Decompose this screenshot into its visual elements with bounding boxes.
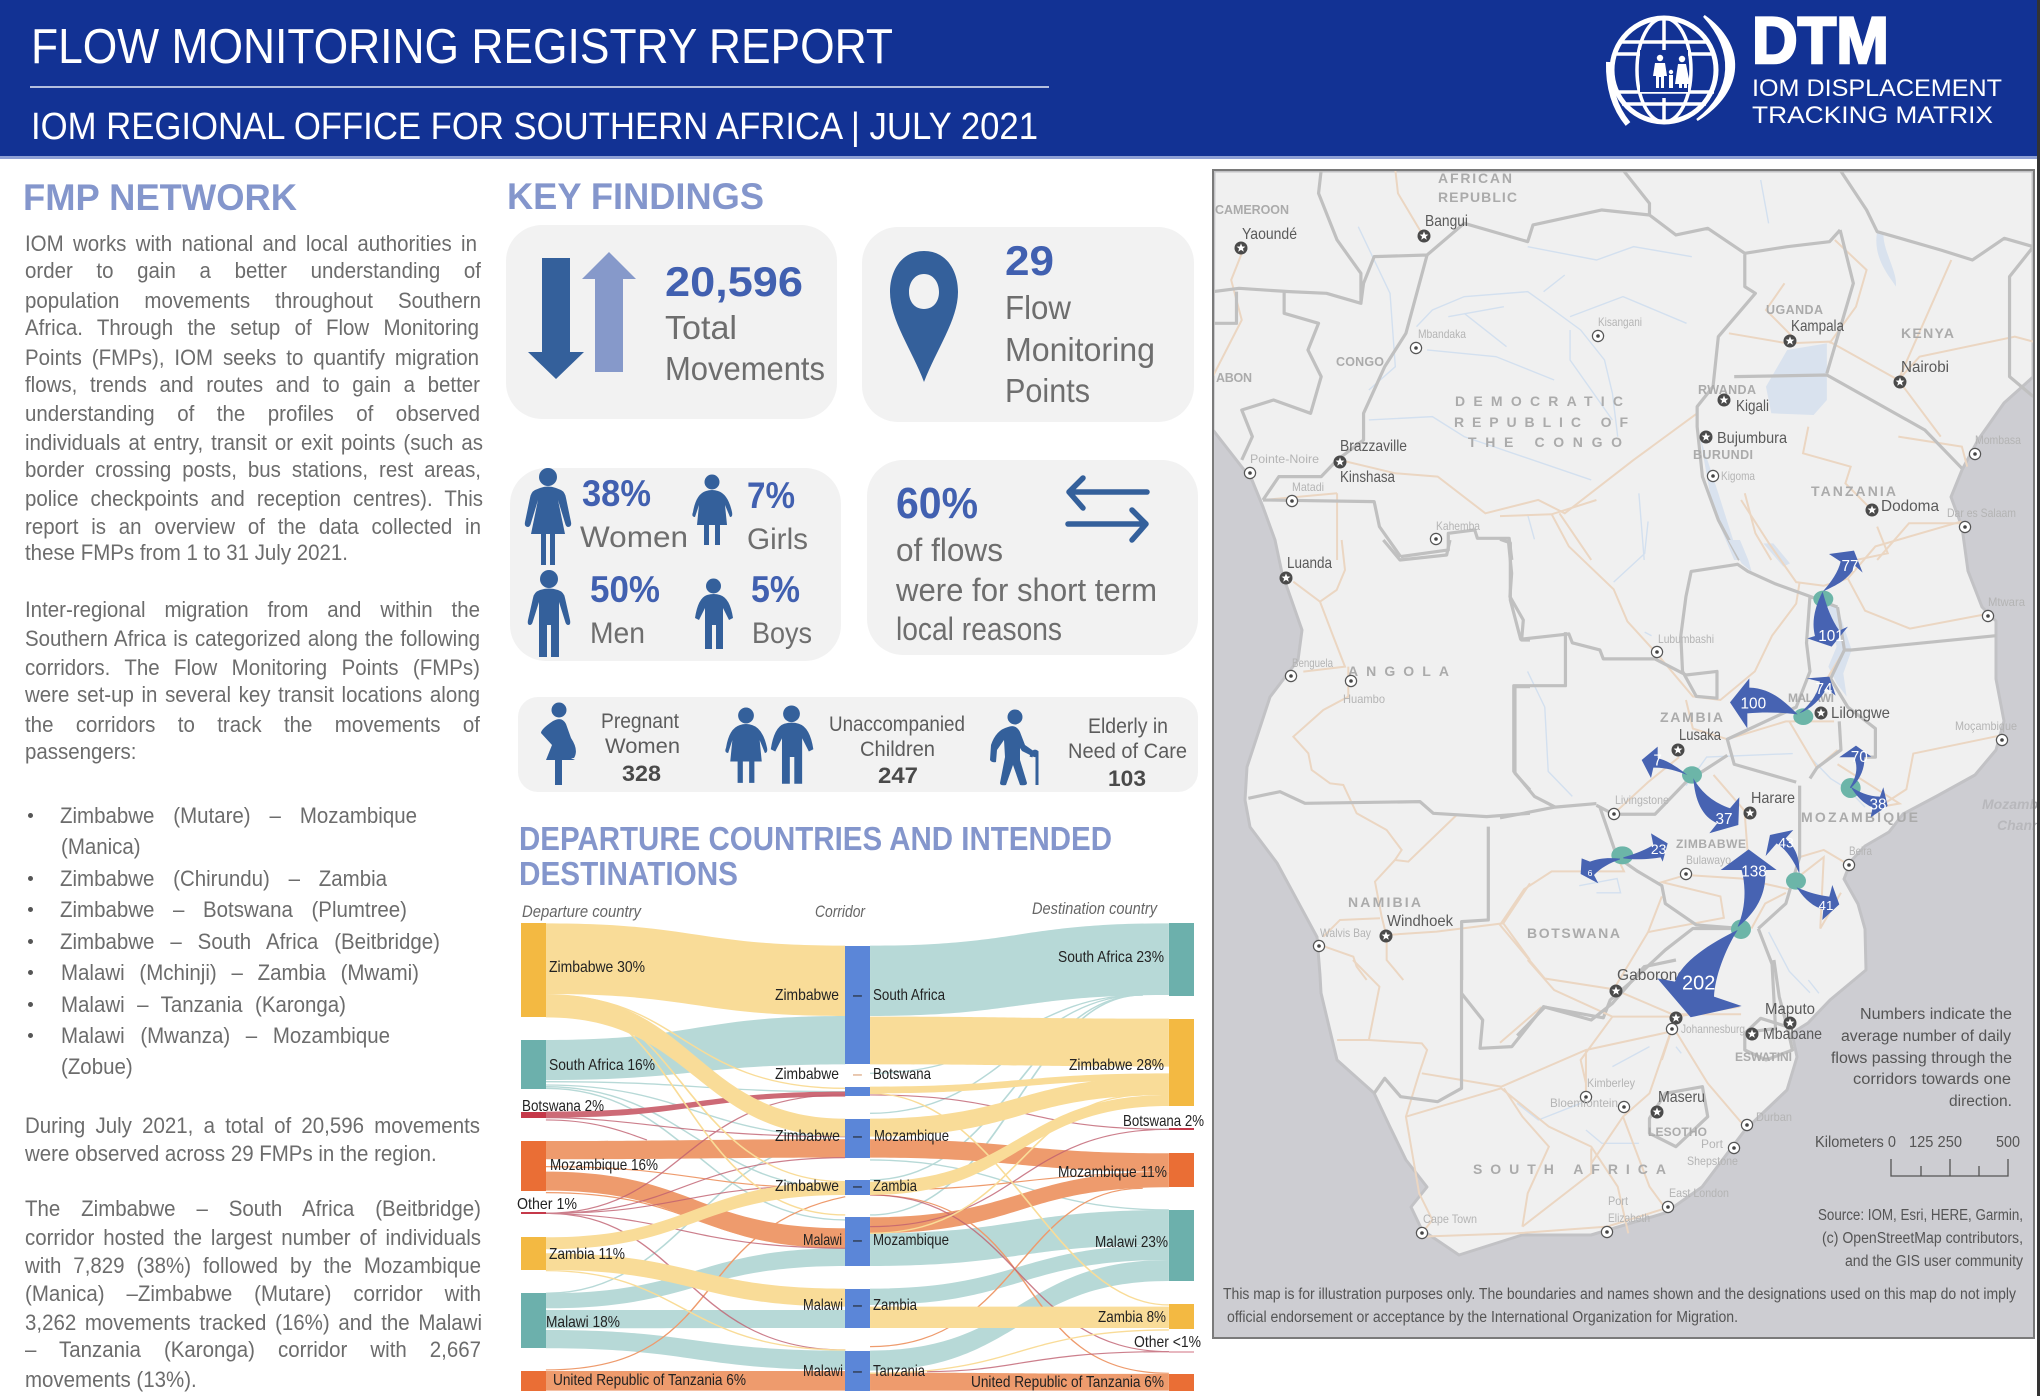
list: corridors	[28, 803, 440, 1079]
text block: largest corridors	[25, 1196, 482, 1392]
list: corridors: Zimbabwe (Mutare) – Mozambique	[60, 803, 417, 828]
text block: FMP introduction	[25, 231, 483, 565]
text block: FMP introduction: Points (FMPs), IOM seeks to quantify migration	[25, 345, 479, 370]
title: FLOW MONITORING REGISTRY REPORT	[31, 20, 893, 74]
map minor city labels: Livingstone	[1615, 793, 1669, 807]
stat: 60 percent of flows: of flows	[896, 532, 1003, 568]
map country labels: AFRICAN	[1438, 170, 1512, 186]
logo: DTM wordmark: TRACKING MATRIX	[1752, 102, 1993, 129]
sankey corridor labels: Malawi	[803, 1232, 842, 1249]
map minor city labels: Bulawayo	[1686, 853, 1731, 867]
stat: 20,596 total movements	[665, 258, 825, 387]
sankey departure labels: Botswana 2%	[522, 1098, 604, 1115]
stat: 29 flow monitoring points: Points	[1005, 372, 1090, 409]
list: corridors: Malawi (Mchinji) – Zambia (Mwami)	[61, 960, 419, 985]
text block: largest corridors: with 7,829 (38%) followed by the Mozambique	[25, 1253, 481, 1278]
sankey destination labels: Zambia 8%	[1098, 1309, 1166, 1326]
list: corridors: Zimbabwe – South Africa (Beitbridge)	[60, 929, 440, 954]
sankey departure labels: Zimbabwe 30%	[549, 959, 645, 976]
sankey destination labels: Botswana 2%	[1123, 1113, 1204, 1130]
northern flow arrows: 37	[1715, 811, 1733, 828]
map country labels: ABON	[1216, 371, 1252, 385]
stat: pregnant women: Women	[605, 735, 680, 758]
stat: 20,596 total movements: 20,596	[665, 258, 803, 305]
stat: 29 flow monitoring points	[1005, 237, 1155, 409]
sankey column headers: Departure country	[522, 902, 642, 921]
sankey column headers	[522, 899, 1158, 921]
map capital city labels: Kigali	[1736, 398, 1769, 415]
text block: FMP introduction: these FMPs from 1 to 31 July 2021.	[25, 540, 348, 565]
southern flow arrows	[1581, 830, 1839, 1017]
map country labels: SOUTH AFRICA	[1473, 1161, 1666, 1177]
stat: men: Men	[590, 617, 645, 650]
map minor city labels: Cape Town	[1423, 1212, 1477, 1226]
icon: girl and boy	[725, 705, 813, 784]
stat: 20,596 total movements: Total	[665, 309, 737, 346]
map capital city labels: Gaborone	[1617, 967, 1686, 984]
map country labels: TANZANIA	[1811, 483, 1896, 499]
map capital city labels: Brazzaville	[1340, 438, 1407, 455]
map minor city labels: Mtwara	[1988, 595, 2025, 609]
sankey destination labels: Malawi 23%	[1095, 1234, 1168, 1251]
text block: corridors introduction	[25, 597, 480, 764]
map minor city labels: Matadi	[1292, 480, 1324, 494]
sankey column headers: Destination country	[1032, 899, 1158, 918]
sankey corridor labels: Zimbabwe	[775, 1178, 839, 1195]
stat: pregnant women	[601, 710, 680, 786]
map minor city labels: Beira	[1849, 844, 1872, 858]
map disclaimer: official endorsement or acceptance by the International Organization for Migration.	[1227, 1309, 1738, 1326]
map capital city labels: Kampala	[1791, 318, 1844, 335]
map source note	[1818, 1207, 2023, 1270]
text block: total movements	[25, 1113, 480, 1166]
map note: how to read numbers: flows passing through the	[1831, 1050, 2012, 1067]
stat: boys: Boys	[752, 617, 812, 650]
stat: pregnant women: 328	[622, 761, 661, 786]
sankey destination nodes	[1169, 923, 1194, 1391]
text block: total movements: were observed across 29 FMPs in the region.	[25, 1141, 437, 1166]
map capital city labels: Dodoma	[1881, 498, 1939, 515]
sankey corridor labels: Mozambique	[874, 1128, 949, 1145]
map country labels: CAMEROON	[1215, 203, 1289, 217]
map minor city markers	[1244, 330, 2008, 1239]
map minor city labels: Port	[1608, 1194, 1629, 1208]
stat: pregnant women: Pregnant	[601, 710, 679, 733]
map minor city labels: Kisangani	[1598, 315, 1642, 329]
icon: down and up arrows	[528, 252, 636, 379]
stat: unaccompanied children	[829, 713, 965, 788]
list: corridors: Malawi (Mwanza) – Mozambique	[61, 1023, 390, 1048]
map minor city labels: Lubumbashi	[1658, 632, 1714, 646]
sankey departure labels: Malawi 18%	[546, 1314, 620, 1331]
map source note: (c) OpenStreetMap contributors,	[1822, 1230, 2023, 1247]
map country labels: MOZAMBIQUE	[1801, 809, 1918, 825]
map minor city labels: Mombasa	[1975, 433, 2021, 447]
map capital city labels: Yaoundé	[1242, 226, 1297, 243]
map country labels: ESWATINI	[1735, 1050, 1792, 1064]
map capital city labels: Lusaka	[1679, 727, 1721, 744]
map minor city labels: Pointe-Noire	[1250, 452, 1319, 466]
sankey corridor labels: –	[853, 1128, 862, 1145]
map country labels: NAMIBIA	[1348, 894, 1421, 910]
sankey column headers: Corridor	[815, 902, 866, 921]
map note: how to read numbers	[1831, 1006, 2012, 1110]
map capital city labels: Luanda	[1287, 555, 1332, 572]
map country labels: Chann	[1997, 817, 2040, 833]
map minor city labels: Johannesburg	[1681, 1022, 1745, 1036]
map capital city markers	[1234, 230, 1906, 1118]
stat: unaccompanied children: Children	[860, 738, 935, 761]
logo: DTM wordmark: DTM	[1752, 3, 1889, 77]
stat: women	[580, 473, 688, 554]
sankey corridor labels: Zimbabwe	[775, 1128, 840, 1145]
map minor city labels: Kahemba	[1436, 519, 1480, 533]
panel: flow monitoring points	[862, 227, 1194, 422]
map country labels: DEMOCRATIC	[1455, 393, 1623, 409]
text block: FMP introduction: order to gain a better understanding of	[25, 258, 481, 283]
map country labels: KENYA	[1901, 325, 1954, 341]
sankey departure labels: United Republic of Tanzania 6%	[553, 1372, 746, 1389]
map source note: and the GIS user community	[1845, 1253, 2023, 1270]
northern flow arrows: 38	[1869, 796, 1887, 813]
southern flow arrows: 43	[1778, 834, 1794, 850]
text block: FMP introduction: understanding of the profiles of observed	[25, 401, 480, 426]
map disclaimer	[1223, 1286, 2016, 1326]
map minor city labels: Durban	[1756, 1110, 1792, 1124]
map minor city labels: Mbandaka	[1418, 327, 1466, 341]
map minor city labels: Moçambique	[1955, 719, 2017, 733]
stat: girls	[747, 475, 808, 556]
sankey flows	[546, 923, 1169, 1391]
sankey corridor labels: Botswana	[873, 1066, 931, 1083]
sankey departure labels: Zambia 11%	[549, 1246, 625, 1263]
sankey destination labels: Other <1%	[1134, 1334, 1201, 1351]
map minor city labels: Dar es Salaam	[1947, 506, 2016, 520]
text block: FMP introduction: report is an overview of the data collected in	[25, 514, 481, 539]
sankey corridor labels: Mozambique	[873, 1232, 949, 1249]
sankey corridor labels: Zimbabwe	[775, 987, 839, 1004]
text block: FMP introduction: IOM works with national and local authorities in	[25, 231, 477, 256]
stat: elderly in need of care: Need of Care	[1068, 740, 1187, 763]
stat: elderly in need of care	[1068, 715, 1187, 791]
stat: 29 flow monitoring points: Monitoring	[1005, 331, 1155, 368]
stat: 20,596 total movements: Movements	[665, 350, 825, 387]
heading: departure countries and intended destinations	[519, 820, 1112, 892]
sankey departure labels	[517, 959, 746, 1389]
text block: FMP introduction: population movements throughout Southern	[25, 288, 481, 313]
sankey corridor labels	[775, 987, 949, 1380]
stat: girls: 7%	[747, 475, 795, 516]
map panel	[1213, 170, 2040, 1338]
sankey corridor labels: Zambia	[873, 1178, 917, 1195]
stat: unaccompanied children: 247	[878, 763, 918, 788]
map scale bar: 500	[1996, 1134, 2020, 1151]
map capital city labels: Mbabane	[1763, 1026, 1822, 1043]
panel: sex and age breakdown	[510, 468, 841, 661]
map country labels: ANGOLA	[1348, 663, 1449, 679]
text block: FMP introduction: border crossing posts, bus stations, rest areas,	[25, 457, 481, 482]
text block: largest corridors: The Zimbabwe – South Africa (Beitbridge)	[25, 1196, 481, 1221]
stat: men	[590, 569, 660, 650]
sankey destination labels	[971, 949, 1204, 1391]
heading: FMP network: FMP NETWORK	[23, 177, 297, 218]
icon: boy	[695, 578, 733, 649]
map note: how to read numbers: average number of daily	[1841, 1028, 2011, 1045]
logo: DTM wordmark: IOM DISPLACEMENT	[1752, 75, 2002, 102]
stat: 60 percent of flows: were for short term	[895, 572, 1157, 608]
map country labels: ZIMBABWE	[1676, 837, 1746, 851]
text block: FMP introduction: Africa. Through the setup of Flow Monitoring	[25, 315, 479, 340]
stat: 60 percent of flows: local reasons	[896, 611, 1062, 647]
icon: girl	[692, 474, 732, 545]
map country labels: UGANDA	[1766, 303, 1823, 317]
stat: boys: 5%	[751, 569, 800, 610]
sankey destination labels: South Africa 23%	[1058, 949, 1164, 966]
logo: DTM wordmark	[1752, 3, 2002, 129]
stat: 29 flow monitoring points: Flow	[1005, 289, 1071, 326]
text block: corridors introduction: passengers:	[25, 739, 136, 764]
map country labels: REPUBLIC	[1438, 189, 1517, 205]
sankey corridor labels: Tanzania	[873, 1363, 925, 1380]
icon: woman	[525, 468, 571, 565]
text block: corridors introduction: the corridors to track the movements of	[25, 712, 480, 737]
northern flow arrows: 77	[1841, 558, 1859, 575]
text block: corridors introduction: were set-up in several key transit locations along	[25, 682, 480, 707]
text block: corridors introduction: corridors. The Flow Monitoring Points (FMPs)	[25, 655, 480, 680]
map note: how to read numbers: direction.	[1949, 1093, 2012, 1110]
map capital city labels: Nairobi	[1901, 359, 1949, 376]
stat: 60 percent of flows: 60%	[896, 479, 978, 528]
northern flow arrows: 7	[1653, 753, 1662, 770]
heading: departure countries and intended destinations: DEPARTURE COUNTRIES AND INTENDED	[519, 820, 1112, 857]
map country labels: BOTSWANA	[1527, 925, 1620, 941]
stat: girls: Girls	[747, 523, 808, 556]
northern flow arrows: 100	[1741, 695, 1766, 712]
sankey departure nodes	[521, 923, 546, 1391]
map minor city labels	[1250, 315, 2025, 1226]
stat: elderly in need of care: Elderly in	[1088, 715, 1168, 738]
stat: 60 percent of flows	[895, 479, 1157, 647]
map country labels: CONGO	[1336, 355, 1384, 369]
map country labels: ZAMBIA	[1660, 709, 1723, 725]
sankey corridor labels: –	[853, 987, 862, 1004]
map country labels: BURUNDI	[1693, 448, 1753, 462]
heading: key findings: KEY FINDINGS	[507, 176, 764, 217]
map minor city labels: East London	[1669, 1186, 1729, 1200]
sankey corridor labels: Malawi	[803, 1363, 843, 1380]
sankey destination labels: United Republic of Tanzania 6%	[971, 1374, 1164, 1391]
map capital city labels: Bangui	[1425, 213, 1468, 230]
southern flow arrows: 6	[1588, 868, 1593, 878]
text block: corridors introduction: Southern Africa is categorized along the following	[25, 626, 480, 651]
southern flow arrows: 23	[1651, 841, 1667, 857]
text block: FMP introduction: individuals at entry, transit or exit points (such as	[25, 430, 483, 455]
panel: short term flows	[867, 460, 1198, 655]
map country labels: RWANDA	[1698, 383, 1756, 397]
stat: elderly in need of care: 103	[1108, 766, 1146, 791]
map country labels: THE CONGO	[1468, 434, 1622, 450]
logo: IOM globe	[1609, 16, 1734, 124]
list: corridors: (Zobue)	[61, 1054, 133, 1079]
sankey corridor labels: –	[853, 1066, 862, 1083]
map capital city labels: Windhoek	[1387, 913, 1454, 930]
stat: women: 38%	[582, 473, 651, 514]
southern flow arrows: 138	[1741, 864, 1767, 881]
chart: sankey of departure, corridor and destination	[517, 899, 1204, 1391]
map minor city labels: Bloemfontein	[1550, 1096, 1618, 1110]
panel: total movements	[506, 225, 837, 419]
map minor city labels: Huambo	[1343, 692, 1385, 706]
list: corridors: Zimbabwe – Botswana (Plumtree)	[60, 897, 407, 922]
sankey corridor labels: Zambia	[873, 1297, 917, 1314]
northern flow arrows	[1642, 551, 1888, 833]
map capital city labels: Bujumbura	[1717, 430, 1787, 447]
icon: elderly person with cane	[990, 710, 1037, 785]
sankey corridor labels: Malawi	[803, 1297, 843, 1314]
map country labels: Mozamb	[1982, 796, 2038, 812]
map minor city labels: Benguela	[1292, 656, 1333, 670]
text block: FMP introduction: flows, trends and routes and to gain a better	[25, 372, 480, 397]
sankey departure labels: Mozambique 16%	[550, 1157, 658, 1174]
heading: departure countries and intended destinations: DESTINATIONS	[519, 855, 738, 892]
sankey corridor labels: –	[853, 1297, 862, 1314]
icon: man	[528, 570, 570, 657]
text block: FMP introduction: police checkpoints and reception centres). This	[25, 486, 483, 511]
northern flow arrows: 74	[1815, 681, 1833, 698]
sankey corridor labels: –	[853, 1363, 862, 1380]
map base: land, borders, roads and rivers	[1213, 170, 2033, 1255]
northern flow arrows: 101	[1818, 628, 1844, 645]
map country labels	[1215, 170, 2040, 1177]
stat: men: 50%	[590, 569, 660, 610]
list: corridors: Malawi – Tanzania (Karonga)	[61, 992, 346, 1017]
map scale bar: Kilometers 0	[1815, 1134, 1896, 1151]
map note: how to read numbers: Numbers indicate the	[1860, 1006, 2012, 1023]
sankey corridor labels: South Africa	[873, 987, 945, 1004]
sankey departure labels: Other 1%	[517, 1196, 577, 1213]
panel: vulnerable groups	[518, 697, 1198, 792]
map minor city labels: Shepstone	[1687, 1154, 1738, 1168]
text block: largest corridors: corridor hosted the largest number of individuals	[25, 1225, 481, 1250]
map scale bar	[1815, 1134, 2020, 1176]
subtitle: IOM REGIONAL OFFICE FOR SOUTHERN AFRICA | JULY 2021	[31, 106, 1038, 148]
list: corridors: Zimbabwe (Chirundu) – Zambia	[60, 866, 387, 891]
icon: pregnant woman	[541, 702, 576, 785]
text block: corridors introduction: Inter-regional migration from and within the	[25, 597, 480, 622]
map capital city labels	[1242, 213, 1949, 1106]
map capital city labels: Maputo	[1765, 1001, 1815, 1018]
map capital city labels: Harare	[1751, 790, 1795, 807]
stat: 29 flow monitoring points: 29	[1005, 237, 1054, 284]
map minor city labels: Kimberley	[1587, 1076, 1635, 1090]
sankey corridor nodes	[845, 946, 870, 1391]
map flow arrows and border points	[1581, 551, 1888, 1017]
map capital city labels: Kinshasa	[1340, 469, 1395, 486]
icon: opposing arrows	[1068, 478, 1147, 540]
map capital city labels: Lilongwe	[1831, 705, 1890, 722]
sankey corridor labels: Zimbabwe	[775, 1066, 839, 1083]
southern flow arrows: 202	[1682, 972, 1715, 994]
map country labels: REPUBLIC OF	[1454, 414, 1628, 430]
text block: largest corridors: 3,262 movements tracked (16%) and the Malawi	[25, 1310, 482, 1335]
sankey destination labels: Zimbabwe 28%	[1069, 1057, 1164, 1074]
southern flow arrows: 41	[1819, 898, 1833, 913]
map minor city labels: Walvis Bay	[1320, 926, 1371, 940]
list: corridors: (Manica)	[61, 834, 141, 859]
map minor city labels: Elizabeth	[1608, 1211, 1650, 1225]
header banner	[0, 0, 2037, 159]
sankey destination labels: Mozambique 11%	[1058, 1164, 1167, 1181]
text block: total movements: During July 2021, a total of 20,596 movements	[25, 1113, 480, 1138]
sankey corridor labels: –	[853, 1232, 862, 1249]
map country labels: MALAWI	[1788, 691, 1834, 705]
sankey departure labels: South Africa 16%	[549, 1057, 655, 1074]
map scale bar: 125 250	[1909, 1134, 1962, 1151]
map country labels: LESOTHO	[1648, 1125, 1707, 1139]
icon: map pin	[890, 251, 958, 382]
text block: largest corridors: (Manica) –Zimbabwe (Mutare) corridor with	[25, 1281, 481, 1306]
map capital city labels: Maseru	[1658, 1089, 1705, 1106]
text block: largest corridors: – Tanzania (Karonga) corridor with 2,667	[25, 1337, 481, 1362]
text block: largest corridors: movements (13%).	[25, 1367, 197, 1392]
map minor city labels: Kigoma	[1721, 469, 1755, 483]
northern flow arrows: 70	[1851, 749, 1868, 766]
stat: boys	[751, 569, 812, 650]
stat: women: Women	[580, 521, 688, 554]
stat: unaccompanied children: Unaccompanied	[829, 713, 965, 736]
map minor city labels: Port	[1701, 1137, 1724, 1151]
sankey corridor labels: –	[853, 1178, 862, 1195]
map note: how to read numbers: corridors towards one	[1853, 1071, 2011, 1088]
